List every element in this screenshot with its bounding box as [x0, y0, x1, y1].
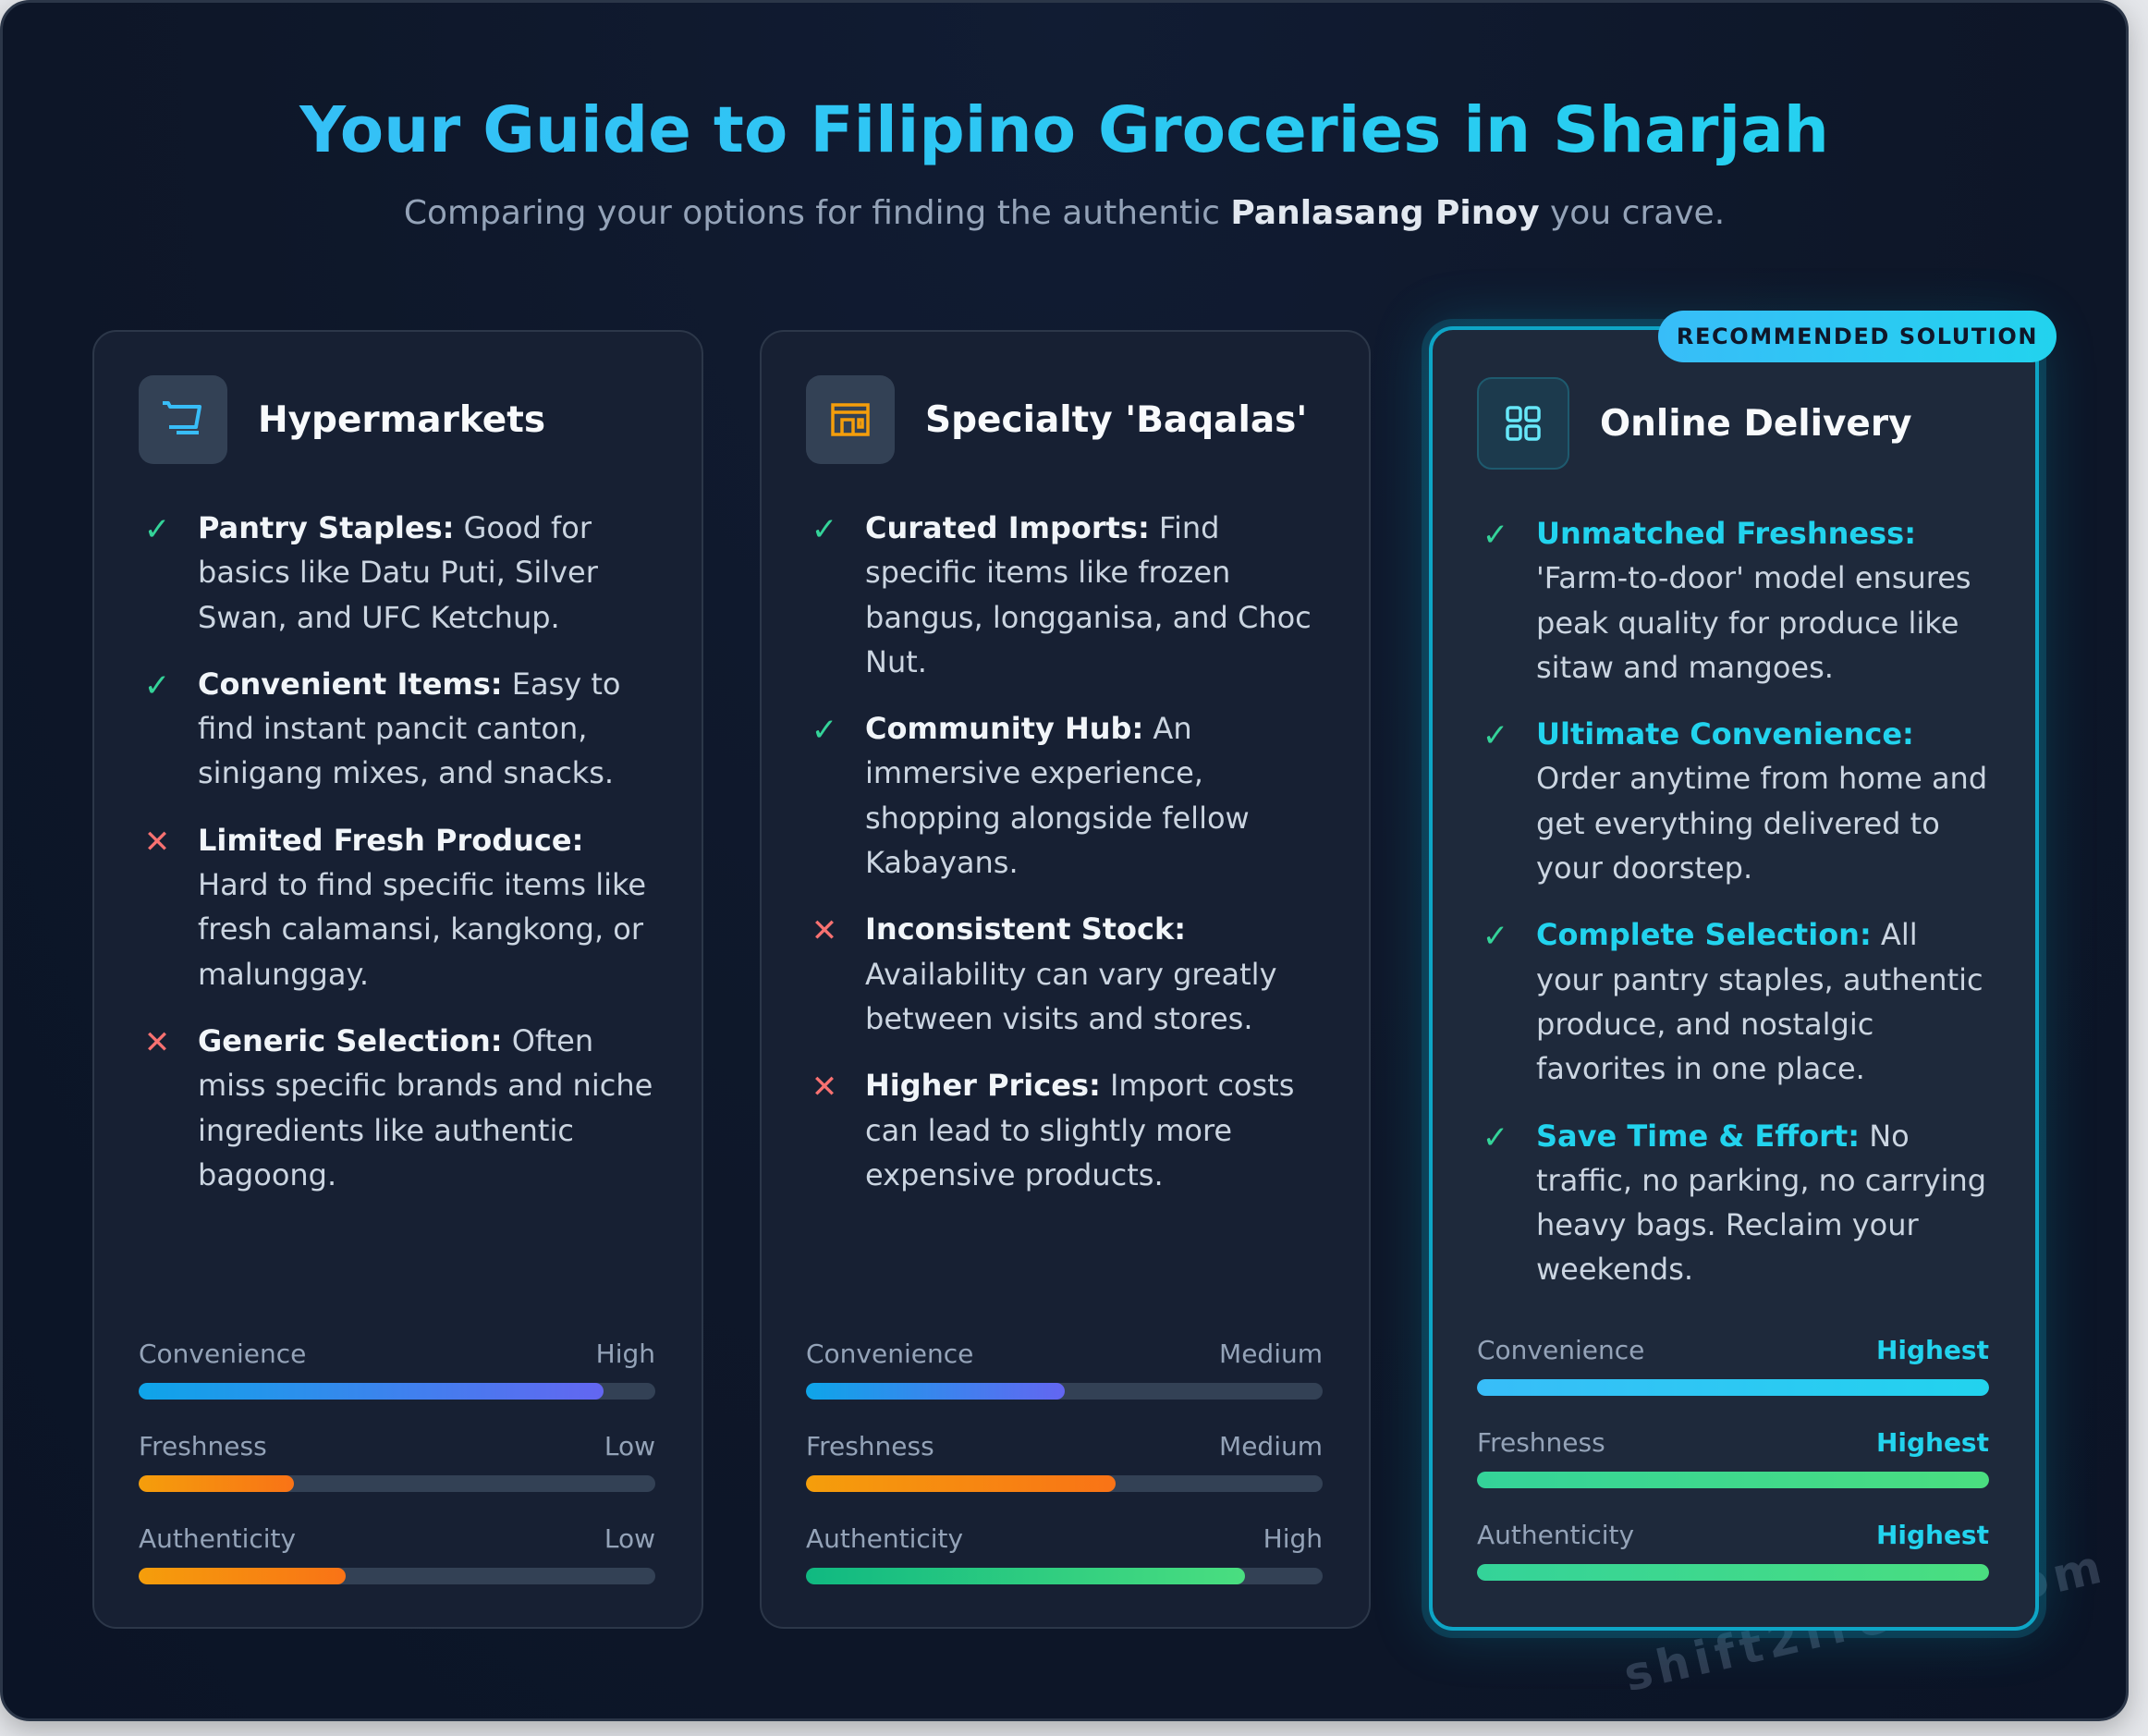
list: baqala pros and cons: ✓ — [812, 511, 837, 548]
ratings: baqalas: Freshness — [806, 1431, 934, 1461]
ratings: hypermarkets: Authenticity — [139, 1523, 296, 1554]
ratings: online delivery: Highest — [1876, 1335, 1989, 1365]
ratings: hypermarkets: Freshness — [139, 1431, 267, 1461]
ratings: online delivery: Highest — [1876, 1427, 1989, 1458]
ratings: online delivery: Convenience — [1477, 1335, 1644, 1365]
list: hypermarket pros and cons: ✓ — [144, 511, 170, 548]
list: baqala pros and cons: Higher Prices: Import costs can lead to slightly more expensive products. — [865, 1068, 1294, 1192]
ratings: hypermarkets — [139, 1339, 655, 1584]
header: baqalas — [806, 375, 1307, 464]
ratings: hypermarkets: High — [596, 1339, 655, 1369]
header: hypermarkets: Hypermarkets — [258, 399, 545, 440]
ratings: hypermarkets: Convenience — [139, 1339, 306, 1369]
ratings: baqalas: Convenience — [806, 1339, 973, 1369]
list: online delivery benefits: ✓ — [1483, 517, 1508, 554]
list: online delivery benefits: Order anytime from home and get everything delivered to your doorstep. — [1536, 761, 1987, 886]
list: online delivery benefits: Save Time & Effort: No traffic, no parking, no carrying heavy bags. Reclaim your weekends. — [1536, 1119, 1986, 1287]
list: online delivery benefits: ✓ — [1483, 717, 1508, 754]
list: hypermarket pros and cons — [144, 510, 653, 1192]
header: hypermarkets — [139, 375, 545, 464]
title — [3, 84, 2126, 177]
ratings: hypermarkets: Low — [604, 1523, 655, 1554]
panel: baqalas — [760, 330, 1371, 1629]
ratings: baqalas: High — [1263, 1523, 1323, 1554]
ratings: hypermarkets: Low — [604, 1431, 655, 1461]
watermark: shift2fresh.com — [1618, 1539, 2112, 1702]
list: hypermarket pros and cons: ✕ — [144, 1024, 170, 1061]
title: Your Guide to Filipino Groceries in Sharjah — [299, 93, 1829, 167]
list: online delivery benefits: 'Farm-to-door' model ensures peak quality for produce like sitaw and mangoes. — [1536, 560, 1971, 685]
list: baqala pros and cons: Curated Imports: Find specific items like frozen bangus, longganisa, and Choc Nut. — [865, 510, 1312, 679]
ratings: baqalas — [806, 1339, 1323, 1584]
badge: recommended solution: RECOMMENDED SOLUTION — [1677, 324, 2038, 349]
ratings: online delivery: Freshness — [1477, 1427, 1605, 1458]
ratings: baqalas: Medium — [1219, 1431, 1323, 1461]
badge: recommended solution — [1658, 311, 2056, 362]
list: hypermarket pros and cons: ✓ — [144, 667, 170, 704]
list: hypermarket pros and cons: Pantry Staples: Good for basics like Datu Puti, Silver Swan, and UFC Ketchup. — [198, 510, 598, 635]
header: online delivery: Online Delivery — [1600, 403, 1912, 444]
list: baqala pros and cons: ✓ — [812, 712, 837, 749]
list: hypermarket pros and cons: Convenient Items: Easy to find instant pancit canton, sinigang mixes, and snacks. — [198, 666, 620, 790]
ratings: online delivery — [1477, 1335, 1989, 1581]
list: hypermarket pros and cons: Limited Fresh Produce: Hard to find specific items like fresh calamansi, kangkong, or malunggay. — [198, 823, 646, 992]
list: hypermarket pros and cons: Generic Selection: Often miss specific brands and niche ingredients like authentic bagoong. — [198, 1023, 653, 1192]
list: hypermarket pros and cons: ✕ — [144, 824, 170, 861]
ratings: online delivery: Highest — [1876, 1520, 1989, 1550]
list: online delivery benefits: Unmatched Freshness: — [1536, 516, 1916, 551]
list: baqala pros and cons: Inconsistent Stock: Availability can vary greatly between visits and stores. — [865, 911, 1277, 1036]
list: online delivery benefits: Complete Selection: All your pantry staples, authentic produce, and nostalgic favorites in one place. — [1536, 917, 1983, 1086]
list: online delivery benefits — [1483, 516, 1987, 1287]
subtitle: Comparing your options for finding the authentic Panlasang Pinoy you crave. — [404, 194, 1725, 232]
list: online delivery benefits: ✓ — [1483, 918, 1508, 955]
list: baqala pros and cons: ✕ — [812, 1069, 837, 1106]
list: baqala pros and cons: Community Hub: An immersive experience, shopping alongside fellow Kabayans. — [865, 711, 1250, 880]
ratings: online delivery: Authenticity — [1477, 1520, 1634, 1550]
list: online delivery benefits: Ultimate Convenience: — [1536, 716, 1914, 752]
header: online delivery — [1477, 377, 1912, 470]
list: baqala pros and cons: ✕ — [812, 912, 837, 949]
panel: hypermarkets — [92, 330, 703, 1629]
ratings: baqalas: Authenticity — [806, 1523, 963, 1554]
header: baqalas: Specialty 'Baqalas' — [925, 399, 1307, 440]
list: online delivery benefits: ✓ — [1483, 1119, 1508, 1156]
ratings: baqalas: Medium — [1219, 1339, 1323, 1369]
panel: online delivery — [1429, 326, 2039, 1631]
list: baqala pros and cons — [812, 510, 1312, 1192]
